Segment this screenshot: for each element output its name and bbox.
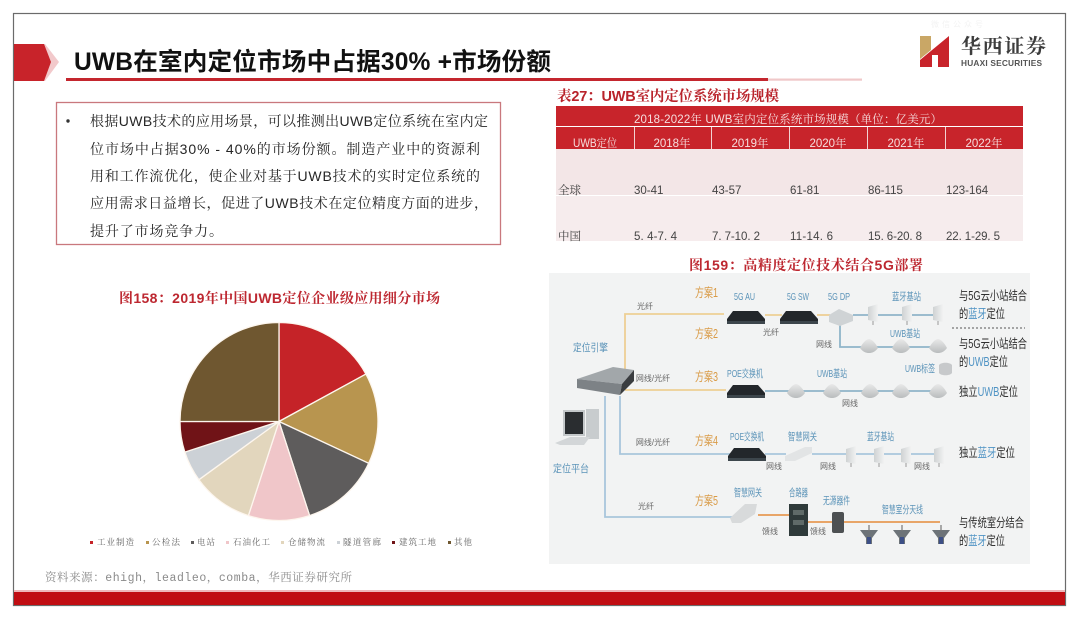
summary paragraph: 用和工作流优化，使企业对基于UWB技术的实时定位系统的 (90, 168, 480, 185)
connection lines (605, 314, 940, 522)
cable labels: 馈线 (810, 526, 826, 536)
heading: table 27: 表27：UWB室内定位系统市场规模 (557, 87, 780, 105)
row 5 devices: 智慧网关 (734, 486, 762, 499)
solution labels: 方案5 (695, 493, 718, 508)
positioning platform computer (553, 409, 599, 475)
scenario labels: 的蓝牙定位 (959, 306, 1005, 321)
pie legend: 隧道管廊 (343, 537, 381, 547)
table row: global: 30-41 (634, 185, 663, 197)
row 1 devices: 蓝牙基站 (892, 290, 921, 303)
pie legend: 公检法 (152, 537, 180, 547)
pie legend (90, 537, 472, 547)
cable labels: 光纤 (637, 301, 653, 311)
heading: figure 158: 图158：2019年中国UWB定位企业级应用细分市场 (119, 290, 440, 306)
scenario labels: 与传统室分结合 (959, 515, 1024, 530)
row 5 devices: 智慧室分天线 (882, 503, 923, 516)
row 4 devices: 智慧网关 (788, 430, 817, 443)
logo: Huaxi Securities (920, 35, 1046, 68)
table header (556, 106, 1023, 150)
table row: China (556, 196, 1023, 243)
cable labels: 网线 (766, 461, 782, 471)
diagram: high precision positioning with 5G (549, 273, 1030, 564)
table row: China: 22. 1-29. 5 (946, 231, 1000, 243)
scenario labels: 与5G云小站结合 (959, 336, 1027, 351)
row 1 devices: 5G AU (734, 291, 755, 303)
solution labels: 方案3 (695, 369, 718, 384)
table row: global: 86-115 (868, 185, 903, 197)
table row: China: 11-14. 6 (790, 231, 833, 243)
cable labels: 网线 (914, 461, 930, 471)
cable labels: 网线 (816, 339, 832, 349)
solution labels: 方案2 (695, 326, 718, 341)
slice: public security (279, 374, 378, 463)
row 3 devices: UWB标签 (905, 362, 935, 375)
pie legend: 其他 (454, 537, 472, 547)
table: UWB market size (556, 106, 1023, 243)
cable labels: 网线 (820, 461, 836, 471)
heading: figure 159: 图159：高精度定位技术结合5G部署 (689, 257, 923, 273)
table row: China: 5. 4-7. 4 (634, 231, 678, 243)
scenario labels: 与5G云小站结合 (959, 288, 1027, 303)
row 4 devices: 蓝牙基站 (867, 430, 894, 443)
cable labels: 网线/光纤 (636, 437, 670, 447)
cable labels: 网线/光纤 (636, 373, 670, 383)
summary paragraph: 根据UWB技术的应用场景，可以推测出UWB定位系统在室内定 (90, 113, 488, 130)
scenario labels: 独立蓝牙定位 (959, 445, 1015, 460)
positioning platform computer: 定位平台 (553, 462, 589, 475)
table header: UWB定位 (573, 137, 617, 150)
table row: China: 15. 6-20. 8 (868, 231, 922, 243)
table header: 2018年 (653, 136, 691, 150)
row 2 devices (860, 327, 947, 353)
solution labels: 方案1 (695, 285, 718, 300)
logo Chinese name: 华西证券 (961, 35, 1046, 58)
slice: construction sites (180, 422, 279, 452)
row 5 devices: 无源器件 (823, 494, 850, 507)
logo English name: HUAXI SECURITIES (961, 58, 1042, 68)
row 2 devices: UWB基站 (890, 327, 920, 340)
summary paragraph: 位市场中占据30% - 40%的市场份额。制造产业中的资源利 (90, 141, 480, 157)
scenario labels: 独立UWB定位 (959, 384, 1018, 399)
pie legend: 建筑工地 (399, 537, 436, 547)
pie legend: 工业制造 (97, 537, 134, 547)
diagram background (549, 273, 1030, 564)
panel: summary text (56, 102, 500, 244)
row 3 devices: UWB基站 (817, 367, 847, 380)
row 5 devices (730, 486, 950, 544)
summary paragraph (90, 113, 488, 239)
row 5 devices: 合路器 (789, 486, 808, 499)
slice: other (180, 322, 279, 422)
table header: 2019年 (731, 136, 769, 150)
summary paragraph: 提升了市场竞争力。 (90, 223, 223, 239)
summary paragraph: 应用需求日益增长，促进了UWB技术在定位精度方面的进步， (90, 195, 488, 212)
row 1 devices: 5G DP (828, 291, 850, 303)
table row: China: 7. 7-10. 2 (712, 231, 760, 243)
table row: global: 61-81 (790, 185, 819, 197)
slice: power station (279, 422, 369, 516)
positioning engine server (573, 341, 634, 395)
pie legend: 仓储物流 (288, 537, 325, 547)
cable labels: 光纤 (638, 501, 654, 511)
table header: 2021年 (887, 136, 925, 150)
table header: 2018-2022年 UWB室内定位系统市场规模（单位：亿美元） (634, 112, 942, 126)
title underline (66, 78, 862, 81)
scenario labels: 的蓝牙定位 (959, 533, 1005, 548)
table row: global: 43-57 (712, 185, 741, 197)
pie legend: 电站 (197, 537, 215, 547)
source note: 资料来源：ehigh，leadleo，comba，华西证券研究所 (45, 570, 352, 585)
cable labels (636, 301, 930, 536)
table row: China: 中国 (558, 229, 581, 243)
slice: petrochemical (248, 422, 310, 520)
solution labels: 方案4 (695, 433, 718, 448)
table row: global (556, 149, 1023, 197)
title banner arrow (14, 44, 59, 81)
table header: 2020年 (809, 136, 847, 150)
cable labels: 光纤 (763, 327, 779, 337)
solution labels (695, 285, 718, 508)
row 1 devices (727, 290, 943, 326)
pie legend: 石油化工 (233, 537, 270, 547)
row 1 devices: 5G SW (787, 291, 809, 303)
watermark: 微信公众号 (931, 19, 983, 29)
row 4 devices (728, 430, 944, 467)
table header: 2022年 (965, 136, 1003, 150)
row 4 devices: POE交换机 (730, 430, 764, 443)
logo mark (920, 36, 949, 67)
table row: global: 123-164 (946, 185, 989, 197)
positioning engine server: 定位引擎 (573, 341, 608, 354)
row 3 devices: POE交换机 (727, 367, 763, 380)
footer bar (14, 590, 1065, 605)
slice: tunnels and pipe corridors (185, 422, 279, 480)
title: UWB在室内定位市场中占据30% +市场份额 (74, 47, 551, 76)
cable labels: 网线 (842, 398, 858, 408)
pie chart (180, 322, 378, 520)
slice: warehousing logistics (199, 422, 279, 516)
table row: global: 全球 (558, 183, 581, 197)
row 3 devices (727, 362, 952, 398)
scenario labels (952, 288, 1027, 548)
cable labels: 馈线 (762, 526, 778, 536)
scenario labels: 的UWB定位 (959, 354, 1008, 369)
bullet (66, 119, 70, 123)
slice: industrial manufacturing (279, 322, 366, 422)
